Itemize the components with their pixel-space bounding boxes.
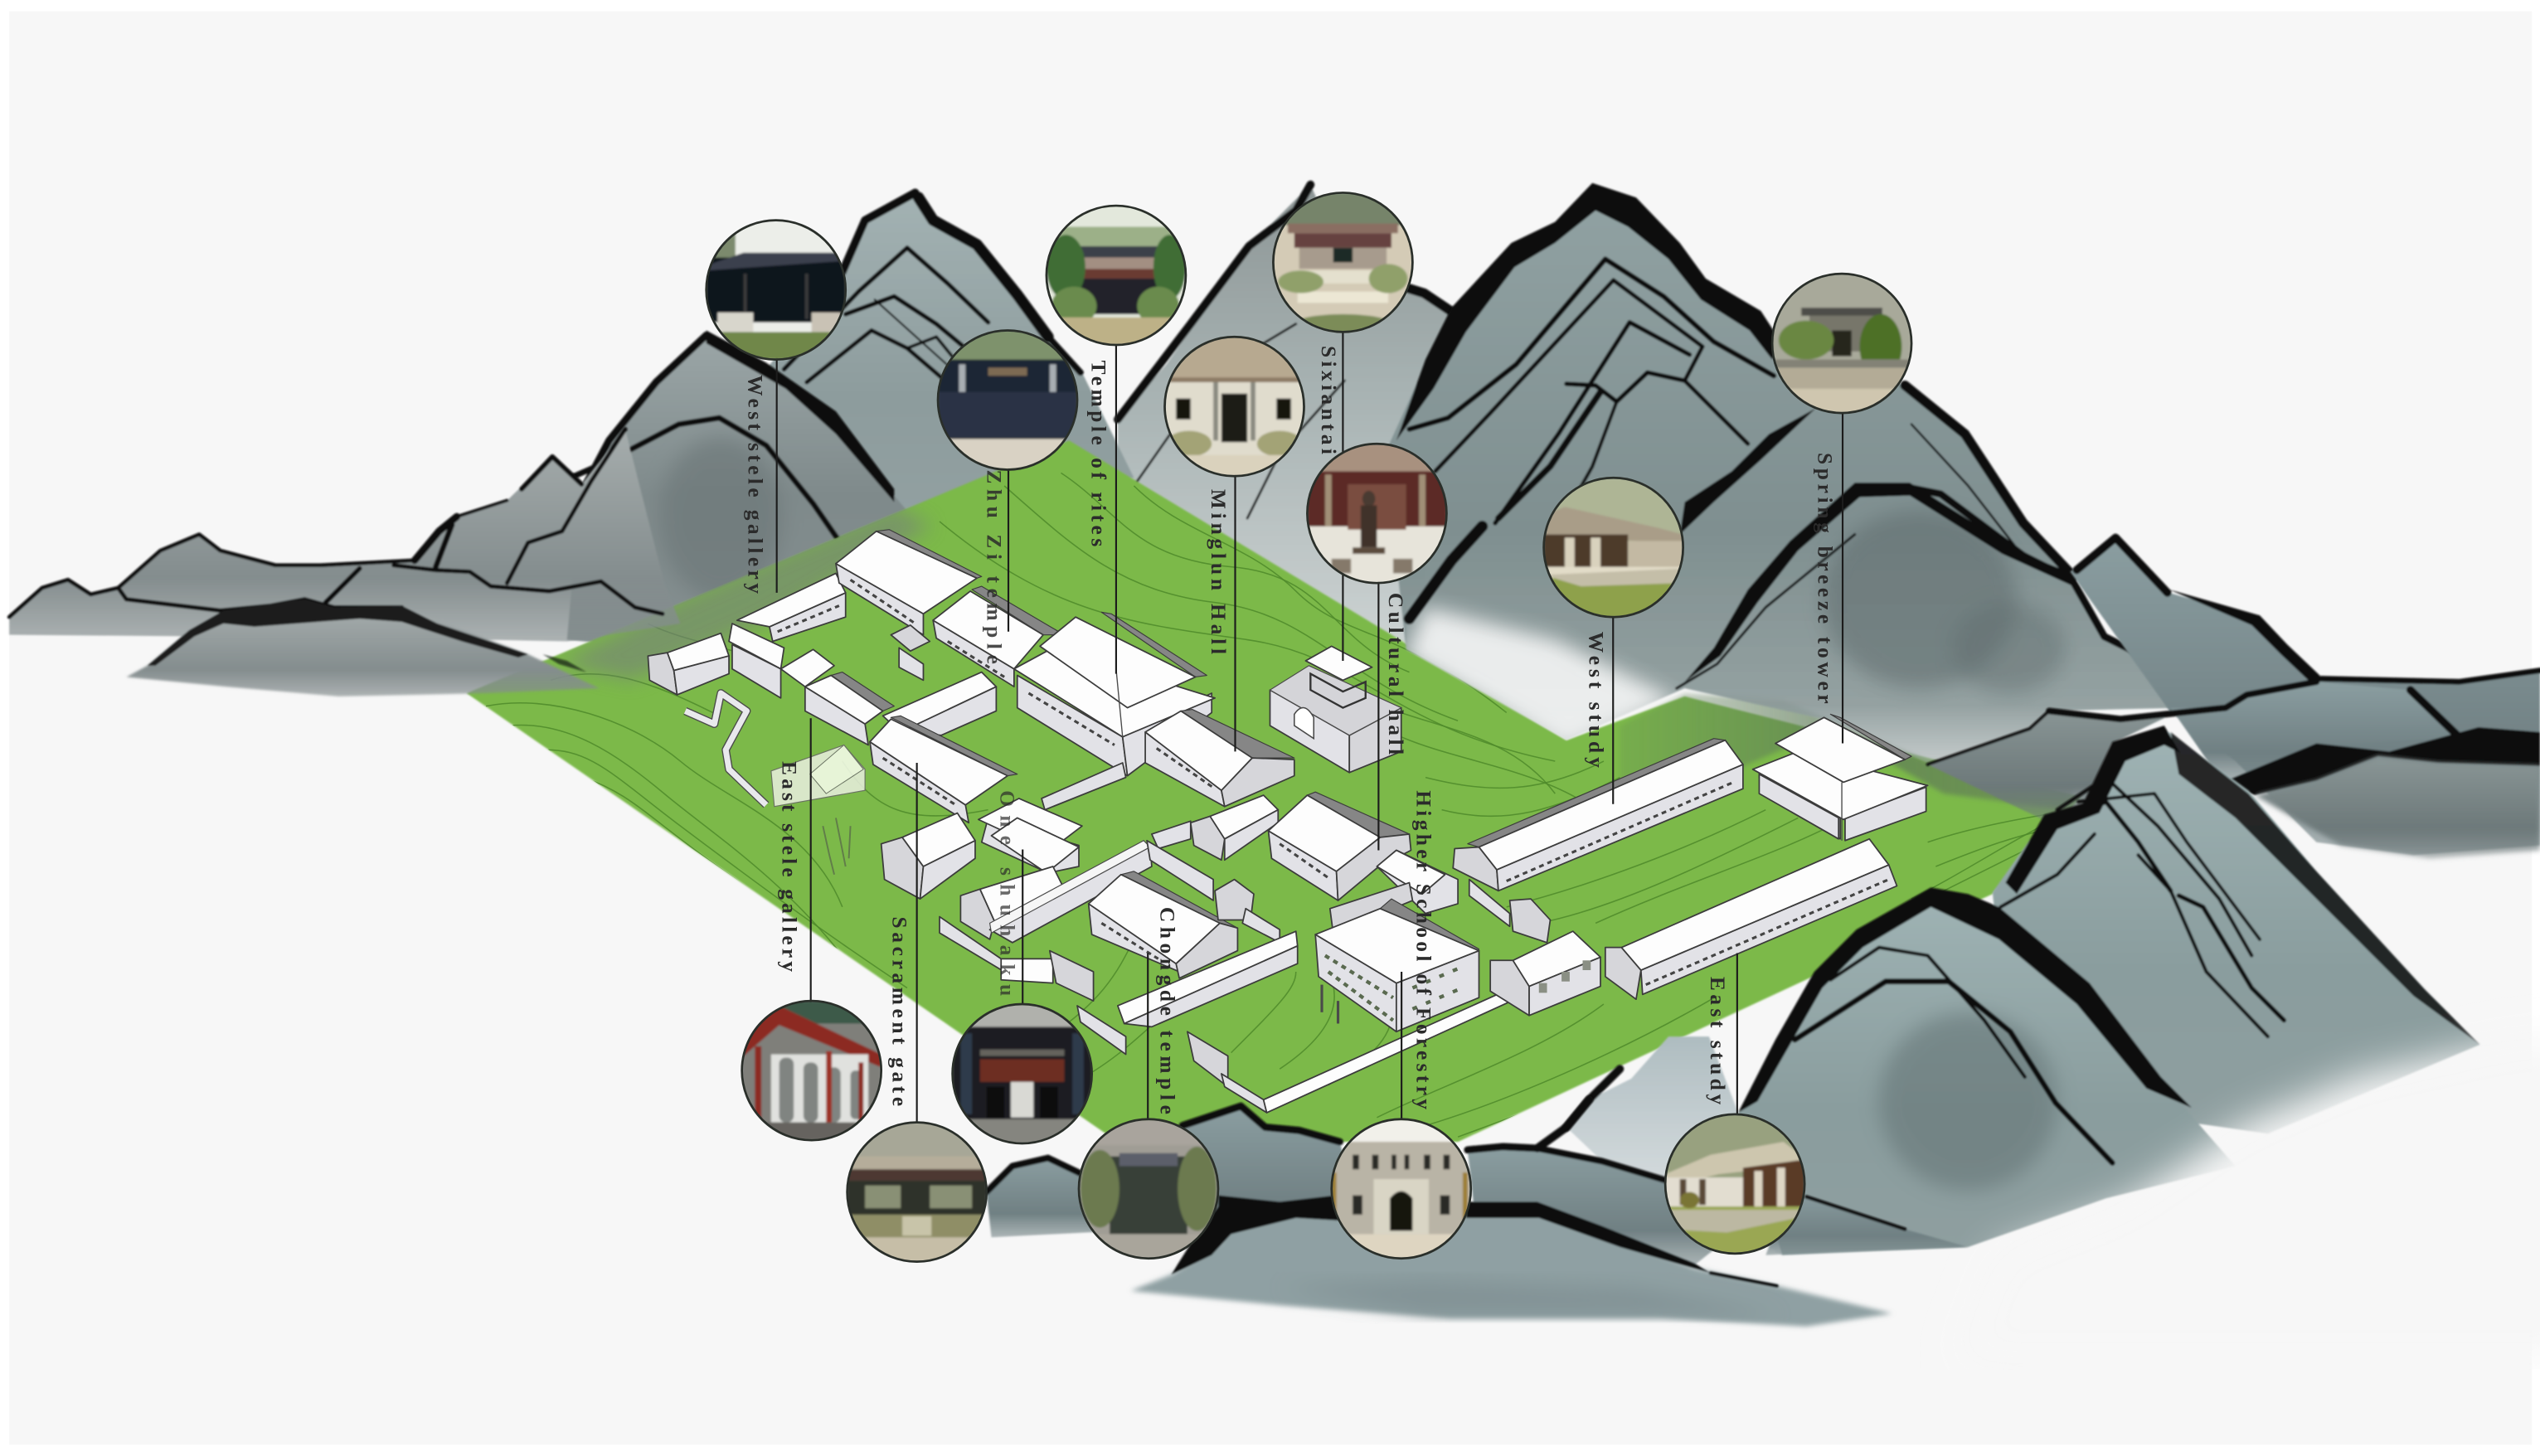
label: East stele gallery: East stele gallery: [778, 761, 801, 972]
building: cross link: [1330, 850, 1458, 933]
building: west stele gallery: [737, 573, 846, 641]
outer wall: [1077, 989, 1508, 1113]
inner side wall: [1147, 841, 1280, 943]
mountain shadow blending over the field's upper-left edge: [559, 505, 931, 680]
building: Spring breeze tower: [1753, 714, 1928, 841]
building: Minglun hall: [1145, 710, 1294, 807]
label: Zhu Zi temple: Zhu Zi temple: [983, 469, 1006, 664]
building: lower left hall: [881, 813, 975, 899]
building: upper gate block: [1191, 795, 1278, 860]
building: Sixiantai gate tower: [1270, 646, 1401, 773]
building: Chongde temple: [1089, 871, 1237, 978]
label: West study: West study: [1584, 632, 1607, 768]
shrubs near east stele gallery: [823, 818, 851, 875]
building: cross hall: [883, 672, 996, 735]
mist over lower right foot: [1960, 1036, 2540, 1361]
mountain: washed small hill at lower right: [1566, 1036, 1782, 1255]
photo: Spring breeze tower: [1772, 274, 1911, 413]
photo: Temple of rites: [1047, 206, 1186, 345]
photo: Cultural hall: [1307, 444, 1446, 583]
building: upper hall: [836, 530, 982, 635]
building: sacrament gate hall: [870, 716, 1017, 823]
building: west end block: [648, 633, 729, 695]
inner ridge strokes: [2001, 778, 2284, 1036]
photo: West stele gallery: [707, 221, 846, 360]
mountain: big right peak: [1385, 183, 2185, 763]
label: Temple of rites: Temple of rites: [1087, 361, 1110, 546]
side wall and pavilion: [1469, 880, 1550, 943]
pavilion in the courtyard: [891, 625, 930, 680]
photo: Higher School of Forestry: [1332, 1119, 1471, 1259]
mountain: upper left peak: [766, 192, 1134, 535]
photo: West study: [1544, 478, 1683, 617]
building: long wall block: [1118, 931, 1298, 1026]
label: Minglun hall: Minglun Hall: [1207, 489, 1230, 654]
winding wall: [685, 693, 766, 805]
label: One shuhaku: One shuhaku: [995, 790, 1018, 996]
photo: One shuhaku: [953, 1004, 1092, 1143]
building: gable block right of school: [1490, 931, 1600, 1016]
building: small hall by east stele gallery: [771, 745, 865, 807]
label: Chongde temple: Chongde temple: [1156, 907, 1179, 1114]
photo: Sacrament gate: [847, 1123, 987, 1262]
mist at the mountain foot: [1406, 607, 1677, 748]
building: east study: [1605, 839, 1897, 999]
photo: Zhu Zi temple: [938, 330, 1077, 469]
mountain: far back washed-out peak: [1118, 185, 1453, 651]
inner ridge strokes: [784, 248, 1024, 437]
building: front gate pavilion: [979, 798, 1082, 873]
building: Cultural hall: [1269, 792, 1411, 900]
building: Temple of rites: [1014, 612, 1215, 776]
building: Higher School of Forestry: [1315, 899, 1479, 1031]
inner ridge strokes: [1409, 260, 1774, 619]
label: Sixiantai: Sixiantai: [1317, 346, 1340, 454]
label: East study: East study: [1706, 977, 1729, 1104]
field: green terraced site: [467, 440, 2081, 1142]
mountain: left mid peak: [567, 330, 948, 656]
label: Sacrament gate: Sacrament gate: [887, 917, 911, 1106]
mountain: right middle range: [1928, 535, 2540, 858]
building: long corridor: [805, 672, 894, 745]
contour lines: [486, 473, 2073, 1137]
building: west study: [1453, 739, 1743, 891]
mountain: bottom ranges: [987, 1099, 1968, 1327]
building: Zhu Zi temple: [933, 586, 1064, 687]
mountain: lower right front peaks: [1738, 726, 2540, 1361]
photo: East stele gallery: [742, 1001, 881, 1140]
mountain: far left low range: [9, 430, 680, 696]
label: Higher School of Forestry: Higher School of Forestry: [1411, 790, 1435, 1109]
photo: Sixiantai: [1273, 192, 1412, 333]
building: connecting hall: [729, 624, 834, 698]
label: Cultural hall: Cultural hall: [1384, 593, 1407, 755]
campus buildings: [648, 530, 1928, 1113]
label: Spring breeze tower: Spring breeze tower: [1814, 453, 1837, 704]
leader lines and rotated labels: [743, 332, 1843, 1123]
photo: Minglun hall: [1165, 337, 1304, 476]
photo: East study: [1665, 1114, 1804, 1254]
building: lower corridor hall: [960, 841, 1152, 943]
west outer wall: [940, 917, 1094, 1001]
mist tint over the field: [1620, 693, 2081, 810]
label: West stele gallery: West stele gallery: [743, 375, 766, 594]
building: bridge strips: [1042, 763, 1191, 849]
photo: Chongde temple: [1079, 1119, 1218, 1259]
